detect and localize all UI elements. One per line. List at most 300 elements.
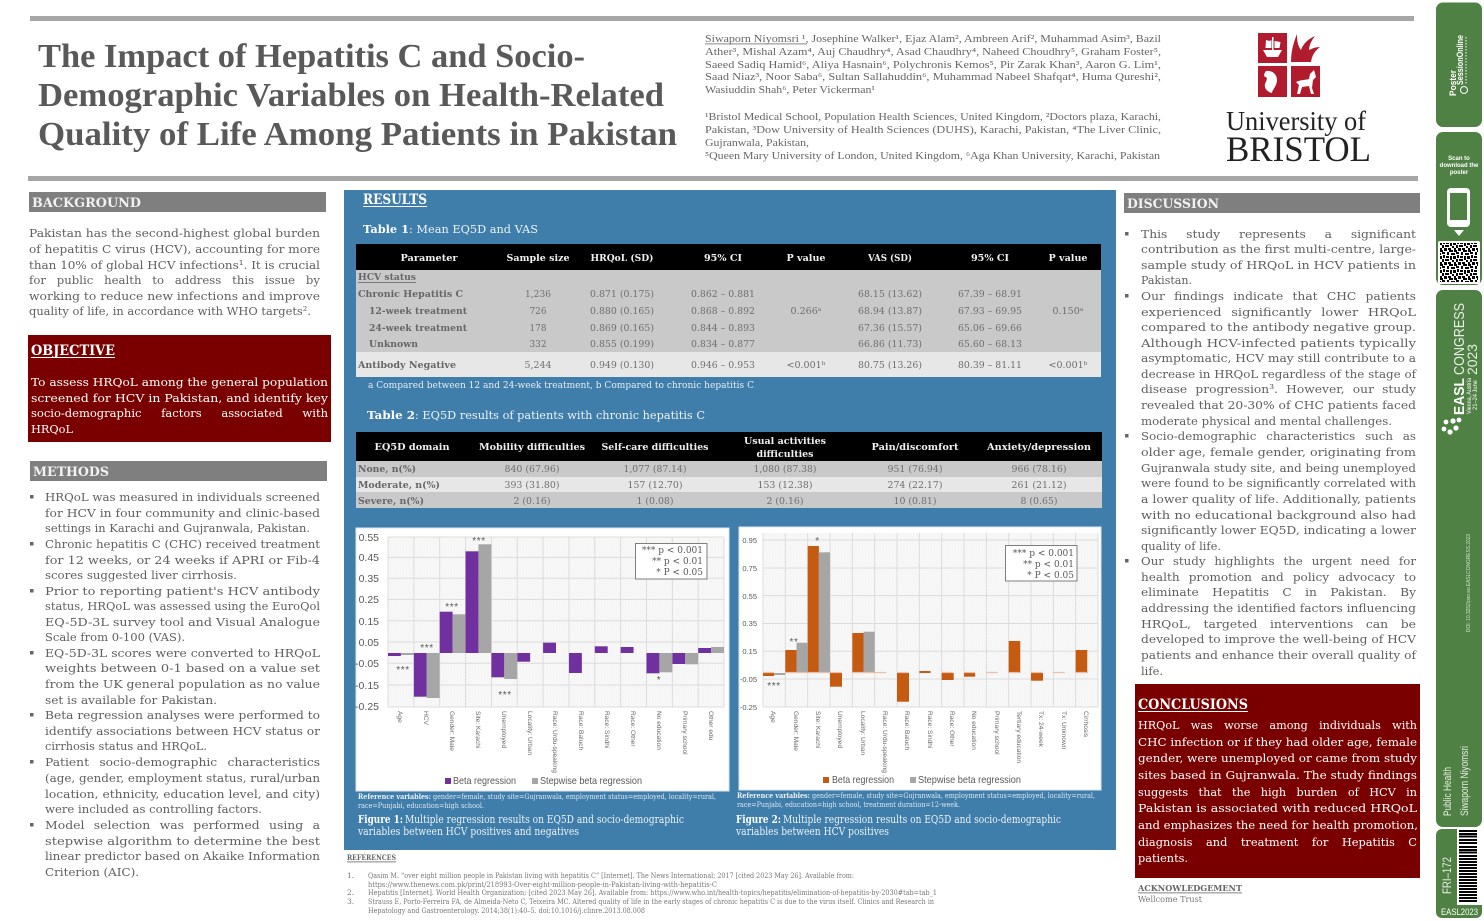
table 2: 153 (12.38) xyxy=(758,480,812,491)
axis tick labels: 0.25 xyxy=(359,594,379,606)
legend: Beta regression xyxy=(832,774,894,786)
logo: University of Bristol xyxy=(1226,33,1371,169)
list: discussion: Gujranwala study site, and being unemployed xyxy=(1141,461,1417,475)
table 1: 80.39 – 81.11 xyxy=(958,360,1022,371)
table 2: 157 (12.70) xyxy=(628,480,682,491)
sidebar: poster number and barcode: FRI–172 xyxy=(1440,857,1454,894)
table 1: 5,244 xyxy=(524,360,552,371)
table 1: 0.871 (0.175) xyxy=(590,289,654,300)
authors: Ather³, Mishal Azam⁴, Auj Chaudhry⁴, Asad Chaudhry⁴, Naheed Choudhry⁵, Graham Foster⁵, xyxy=(705,46,1161,58)
scan caption: download the xyxy=(1440,163,1479,169)
category labels: Primary school xyxy=(993,711,1000,755)
bars: stepwise beta regression xyxy=(774,552,875,675)
references xyxy=(347,853,937,915)
text block: objective: screened for HCV in Pakistan, and identify key xyxy=(31,391,329,405)
table 1: 65.60 – 68.13 xyxy=(958,339,1022,350)
axis tick labels: 0.45 xyxy=(359,552,379,564)
authors: Wasiuddin Shah⁶, Peter Vickerman¹ xyxy=(705,84,875,96)
significance key xyxy=(1006,546,1077,581)
table 1: Chronic Hepatitis C xyxy=(358,289,463,300)
table 2 title: : EQ5D results of patients with chronic hepatitis C xyxy=(415,409,705,422)
table 1: 0.855 (0.199) xyxy=(590,339,654,350)
figure 2 caption: Multiple regression results on EQ5D and socio-demographic xyxy=(783,813,1061,826)
significance stars: *** xyxy=(498,690,512,701)
table 1: 1,236 xyxy=(525,289,551,300)
authors: Saeed Sadiq Hamid⁶, Aliya Hasnain⁶, Polychronis Kemos⁵, Pir Zarak Khan³, Aaron G. Lim¹, xyxy=(705,59,1161,71)
table 2: 1,077 (87.14) xyxy=(624,464,686,475)
references: Hepatology and Gastroenterology. 2014;38(1):40–5. doi:10.1016/j.clinre.2013.08.008 xyxy=(368,906,645,915)
significance stars xyxy=(396,536,661,701)
list: methods: Scale from 0-100 (VAS). xyxy=(45,630,185,644)
table 1: 0.880 (0.165) xyxy=(590,306,654,317)
list: discussion: Our study highlights the urgent need for xyxy=(1141,554,1417,568)
list: discussion: revealed that 20-30% of CHC patients faced xyxy=(1141,398,1417,412)
table 2: 261 (21.12) xyxy=(1012,480,1066,491)
authors: Saad Niaz³, Noor Saba⁶, Sultan Sallahuddin⁶, Muhammad Nabeel Shafqat⁴, Huma Qureshi², xyxy=(705,71,1161,83)
sidebar: EASL congress: Vienna, Austria xyxy=(1467,377,1473,414)
heading: methods: METHODS xyxy=(33,465,109,480)
list: discussion: eliminate Hepatitis C in Pakistan. By xyxy=(1141,585,1417,599)
axis tick labels: -0.25 xyxy=(355,701,379,713)
authors: Siwaporn Niyomsri ¹, Josephine Walker¹, Ejaz Alam², Ambreen Arif², Muhammad Asim³, Bazil xyxy=(705,33,1161,45)
list: discussion: moderate physical and mental challenges. xyxy=(1141,414,1392,428)
table 2: Severe, n(%) xyxy=(358,496,424,507)
list: methods: set is available for Pakistan. xyxy=(45,693,217,707)
list: methods: location, ethnicity, education level, and city) xyxy=(45,787,320,801)
table 1: 67.93 – 69.95 xyxy=(958,306,1022,317)
significance key: *** p < 0.001 xyxy=(642,546,703,556)
list: discussion: significantly lower EQ5D, indicating a lower xyxy=(1141,523,1417,537)
affiliations: ⁵Queen Mary University of London, United Kingdom, ⁶Aga Khan University, Karachi, Pakistan xyxy=(705,150,1161,162)
axis tick labels: -0.05 xyxy=(355,658,379,670)
text block: background: than 10% of global HCV infections¹. It is crucial xyxy=(29,258,320,272)
category labels: Race: Sindhi xyxy=(603,711,610,749)
sidebar: poster session online: Poster xyxy=(1448,70,1459,96)
list: methods xyxy=(30,490,321,879)
figure 1 caption: Multiple regression results on EQ5D and socio-demographic xyxy=(405,813,684,826)
list: discussion: Pakistan. xyxy=(1141,273,1192,287)
heading: objective: OBJECTIVE xyxy=(31,343,115,359)
axis tick labels: 0.55 xyxy=(359,532,379,544)
axis tick labels: 0.15 xyxy=(742,647,757,656)
sidebar: poster number and barcode xyxy=(1436,829,1482,918)
affiliations: ¹Bristol Medical School, Population Health Sciences, United Kingdom, ²Doctors plaza, Karachi, xyxy=(705,111,1161,123)
axis tick labels: 0.75 xyxy=(742,564,757,573)
significance stars: *** xyxy=(767,681,781,692)
list: discussion: with no educational background also had xyxy=(1141,508,1417,522)
significance stars: ** xyxy=(790,637,798,648)
list: discussion: compared to the antibody negative group. xyxy=(1141,320,1416,334)
category labels: Race: Sindhi xyxy=(926,711,933,749)
table 1: 95% CI xyxy=(971,253,1010,264)
sidebar: EASL congress: 2023 xyxy=(1464,344,1480,375)
category labels: Site: Karachi xyxy=(814,711,821,749)
table 1: Antibody Negative xyxy=(357,360,456,371)
text block: objective: socio-demographic factors associated with xyxy=(31,406,329,420)
list: discussion: contribution as the first multi-centre, large- xyxy=(1141,242,1416,256)
significance stars: *** xyxy=(472,536,486,547)
text block: background xyxy=(29,226,321,318)
heading: methods xyxy=(30,461,327,481)
table 1: Sample size xyxy=(506,253,570,264)
text block: objective xyxy=(31,375,329,436)
list: discussion: a lower quality of life. Additionally, patients xyxy=(1141,492,1416,506)
table 2: 2 (0.16) xyxy=(766,496,804,507)
list: methods: Beta regression analyses were performed to xyxy=(45,708,320,722)
references: Hepatitis [Internet]. World Health Organization; [cited 2023 May 26]. Available from: https://www.who.int/health-topics/hepatitis/elimination-of-hepatitis-by-2030#tab=tab_1 xyxy=(368,888,937,897)
table 2: EQ5D domain xyxy=(374,442,450,453)
panel: objective xyxy=(28,335,331,442)
chart: figure 1 bar chart xyxy=(355,528,729,791)
significance key: * P < 0.05 xyxy=(1027,571,1074,581)
axis tick labels: 0.55 xyxy=(742,592,757,601)
references: Strauss E, Porto-Ferreira FA, de Almeida-Neto C, Teixeira MC. Altered quality of life in the early stages of chronic hepatitis C is due to the virus itself. Clinics and Research in xyxy=(368,897,934,906)
category labels: Race: Baluch xyxy=(903,711,910,751)
sidebar: poster number and barcode: EASL2023 xyxy=(1441,907,1478,917)
list: discussion: life. xyxy=(1141,664,1163,678)
bars: beta regression xyxy=(388,551,711,697)
legend xyxy=(445,775,642,787)
axis tick labels: 0.05 xyxy=(359,637,379,649)
affiliations: Gujranwala, Pakistan, xyxy=(705,137,809,149)
figure 1 reference variables: Reference variables: xyxy=(358,792,431,801)
barcode xyxy=(1459,831,1477,901)
affiliations: Pakistan, ³Dow University of Health Sciences (DUHS), Karachi, Pakistan, ⁴The Liver Clinic, xyxy=(705,124,1161,136)
table 1: 178 xyxy=(530,323,546,334)
heading: discussion xyxy=(1124,193,1420,213)
heading: results: RESULTS xyxy=(363,192,427,208)
list: methods: for HCV in four community and clinic-based xyxy=(45,506,321,520)
sidebar: EASL congress: 21–24 June xyxy=(1473,379,1479,410)
top rule xyxy=(30,16,1414,21)
table 1: 726 xyxy=(530,306,546,317)
significance stars xyxy=(767,536,820,692)
axis tick labels: 0.95 xyxy=(742,536,757,545)
text block: conclusions: diagnosis and treatment for Hepatitis C xyxy=(1138,835,1417,849)
axis tick labels xyxy=(355,532,379,713)
heading: discussion: DISCUSSION xyxy=(1127,197,1219,212)
panel: methods xyxy=(30,461,327,879)
panel: conclusions xyxy=(1135,684,1420,878)
list: methods: linear predictor based on Akaike Information xyxy=(45,849,321,863)
category labels: Tx: Unknown xyxy=(1060,711,1067,750)
table 1: <0.001ᵇ xyxy=(1048,360,1088,371)
list: discussion xyxy=(1125,227,1417,678)
table 2: 1 (0.08) xyxy=(636,496,674,507)
table 1 title: Table 1 xyxy=(363,223,409,236)
table 2: Pain/discomfort xyxy=(872,442,959,453)
category labels: Race: Urdu-speaking xyxy=(551,711,558,773)
list: methods: from the UK general population as no value xyxy=(45,677,320,691)
table 2: 8 (0.65) xyxy=(1020,496,1058,507)
title: The Impact of Hepatitis C and Socio- xyxy=(38,38,585,75)
references: 2. xyxy=(347,888,354,897)
significance stars: * xyxy=(815,536,820,547)
list: discussion: were found to be significantly correlated with xyxy=(1141,476,1417,490)
table 1: 0.869 (0.165) xyxy=(590,323,654,334)
table 1 footnote: a Compared between 12 and 24-week treatment, b Compared to chronic hepatitis C xyxy=(368,380,754,391)
category labels: Race: Urdu-speaking xyxy=(881,711,888,773)
significance stars: *** xyxy=(445,602,459,613)
text block: conclusions: Pakistan is associated with reduced HRQoL xyxy=(1138,801,1417,815)
table 1: 80.75 (13.26) xyxy=(858,360,922,371)
list: discussion: asymptomatic, HCV may still contribute to a xyxy=(1141,351,1416,365)
list: discussion: This study represents a significant xyxy=(1141,227,1416,241)
sidebar: EASL congress xyxy=(1436,290,1482,827)
text block: background: quality of life, in accordance with WHO targets². xyxy=(29,304,311,318)
significance key: ** p < 0.01 xyxy=(652,557,703,567)
table 2: Anxiety/depression xyxy=(986,442,1091,453)
sidebar: EASL congress: DOI: 10.3252/pso.eu.EASLCONGRESS.2023 xyxy=(1466,534,1472,632)
figure 2 caption: Figure 2: xyxy=(736,813,781,826)
text block: conclusions: patients. xyxy=(1138,851,1188,865)
figure 2 reference variables: gender=female, study site=Gujranwala, employment status=employed, locality=rural, xyxy=(812,791,1095,800)
list: discussion: decrease in HRQoL regardless of the stage of xyxy=(1141,367,1417,381)
category labels: Gender: Male xyxy=(448,711,455,751)
table 1: 0.868 – 0.892 xyxy=(691,306,755,317)
sidebar: EASL congress: Public Health xyxy=(1442,767,1454,816)
heading: background xyxy=(29,192,326,212)
category labels: Race: Baluch xyxy=(577,711,584,751)
table 1: HRQoL (SD) xyxy=(590,253,654,264)
list: discussion: health promotion and policy advocacy to xyxy=(1141,570,1416,584)
table 1: P value xyxy=(1048,253,1088,264)
category labels xyxy=(769,711,1089,773)
text block: background: for public health to address this issue by xyxy=(29,273,321,287)
list: methods: cirrhosis status and HRQoL. xyxy=(45,739,207,753)
list: discussion: disease progression³. However, our study xyxy=(1141,382,1417,396)
text block: conclusions: and emphasizes the need for health promotion, xyxy=(1138,818,1418,832)
list: discussion: sample study of HRQoL in HCV patients in xyxy=(1141,258,1417,272)
figure 1 caption: variables between HCV positives and negatives xyxy=(357,825,579,838)
figure 1 reference variables: gender=female, study site=Gujranwala, employment status=employed, locality=rural, xyxy=(433,792,716,801)
title xyxy=(38,38,677,153)
table 1: 0.266ᵃ xyxy=(790,306,822,317)
table 1: Unknown xyxy=(369,339,418,350)
sidebar: EASL congress: EASL xyxy=(1451,378,1468,415)
legend xyxy=(823,774,1021,786)
zero-line overlay xyxy=(763,672,1087,674)
legend: Stepwise beta regression xyxy=(918,774,1021,786)
list: methods: Prior to reporting patient's HCV antibody xyxy=(45,584,321,598)
sidebar: EASL congress: Siwaporn Niyomsri xyxy=(1459,746,1471,816)
table 1: 0.150ᵃ xyxy=(1052,306,1084,317)
text block: conclusions: HRQoL was worse among individuals with xyxy=(1138,718,1418,732)
table 2: 274 (22.17) xyxy=(888,480,942,491)
table 2: 951 (76.94) xyxy=(888,464,942,475)
title: Demographic Variables on Health-Related xyxy=(38,77,664,114)
references: 3. xyxy=(347,897,354,906)
axis tick labels: 0.35 xyxy=(359,573,379,585)
list: methods: scores suggested liver cirrhosis. xyxy=(45,568,237,582)
text block: background: Pakistan has the second-highest global burden xyxy=(29,226,321,240)
significance stars: *** xyxy=(420,643,434,654)
table 1: <0.001ᵇ xyxy=(786,360,826,371)
significance key xyxy=(636,544,707,579)
chart: figure 2 bar chart xyxy=(739,527,1101,790)
table 2: 966 (78.16) xyxy=(1012,464,1066,475)
figure 2 caption: variables between HCV positives xyxy=(735,825,889,838)
text block: background: of hepatitis C virus (HCV), accounting for more xyxy=(29,242,320,256)
significance stars: * xyxy=(657,675,661,686)
category labels: Tertiary education xyxy=(1015,711,1022,763)
table 1: 68.94 (13.87) xyxy=(858,306,922,317)
acknowledgement: ACKNOWLEDGEMENT xyxy=(1137,884,1243,894)
references: 1. xyxy=(347,871,354,880)
list: discussion: quality of life. xyxy=(1141,539,1221,553)
heading: background: BACKGROUND xyxy=(32,196,141,211)
table 1: 0.946 – 0.953 xyxy=(691,360,755,371)
logo: University of Bristol: BRISTOL xyxy=(1226,129,1371,169)
list: discussion: addressing the identified factors influencing xyxy=(1141,601,1417,615)
figure 1 caption xyxy=(357,813,684,838)
axis tick labels: -0.15 xyxy=(355,680,379,692)
panel: background xyxy=(29,192,326,318)
icon: phone xyxy=(1447,188,1470,236)
table 2: 2 (0.16) xyxy=(514,496,550,507)
table 2: 1,080 (87.38) xyxy=(754,464,816,475)
table 2: Mobility difficulties xyxy=(479,442,585,453)
table 1: 67.39 – 68.91 xyxy=(958,289,1022,300)
list: discussion: older age, female gender, originating from xyxy=(1141,445,1416,459)
table 1: 65.06 – 69.66 xyxy=(958,323,1022,334)
text block: objective: To assess HRQoL among the general population xyxy=(31,375,329,389)
category labels: No education xyxy=(655,711,662,750)
list: methods: EQ-5D-3L scores were converted to HRQoL xyxy=(45,646,320,660)
table 2: Self-care difficulties xyxy=(602,442,708,453)
axis tick labels: 0.35 xyxy=(742,619,757,628)
text block: conclusions: sites based in Gujranwala. The study findings xyxy=(1138,768,1417,782)
category labels: Primary school xyxy=(681,711,688,755)
list: methods: weights between 0-1 based on a value set xyxy=(45,661,320,675)
significance key: ** p < 0.01 xyxy=(1023,560,1074,570)
legend: Beta regression xyxy=(453,775,516,787)
table 2: 393 (31.80) xyxy=(504,480,560,491)
list: methods: Criterion (AIC). xyxy=(45,865,139,879)
category labels: No education xyxy=(970,711,977,750)
list: methods: Chronic hepatitis C (CHC) received treatment xyxy=(45,537,320,551)
list: discussion: HRQoL, targeted interventions can be xyxy=(1141,617,1416,631)
table 1: VAS (SD) xyxy=(867,253,912,264)
list: methods: Patient socio-demographic characteristics xyxy=(45,755,320,769)
legend: Stepwise beta regression xyxy=(540,775,642,787)
wordmark: University of xyxy=(1226,106,1366,136)
list: discussion: Although HCV-infected patients typically xyxy=(1140,336,1417,350)
text block: conclusions: suggests that the high burden of HCV in xyxy=(1138,785,1418,799)
table 1: 66.86 (11.73) xyxy=(858,339,922,350)
references: REFERENCES xyxy=(347,853,396,862)
table 2 xyxy=(356,432,1102,508)
table 2 title: Table 2 xyxy=(367,409,415,422)
list: discussion: Our findings indicate that CHC patients xyxy=(1141,289,1416,303)
table 1: 332 xyxy=(530,339,546,350)
list: methods: status, HRQoL was assessed using the EuroQol xyxy=(45,599,320,613)
text block: background: working to reduce new infections and improve xyxy=(29,289,320,303)
table 1: Parameter xyxy=(400,253,459,264)
title: Quality of Life Among Patients in Pakistan xyxy=(38,116,677,153)
table 1: 95% CI xyxy=(704,253,743,264)
list: methods: Model selection was performed using a xyxy=(45,818,320,832)
list: discussion: patients and enhance their overall quality of xyxy=(1141,648,1417,662)
icon: university crest xyxy=(1258,33,1320,97)
acknowledgement xyxy=(1137,884,1243,905)
table 1 xyxy=(356,244,1101,377)
significance key: *** p < 0.001 xyxy=(1013,549,1074,559)
scan caption: poster xyxy=(1450,170,1469,176)
text block: conclusions xyxy=(1138,718,1418,865)
list: methods: stepwise algorithm to determine the best xyxy=(45,834,320,848)
list: discussion: developed to improve the well-being of HCV xyxy=(1141,632,1417,646)
authors xyxy=(705,33,1161,96)
axis tick labels xyxy=(740,536,757,712)
category labels xyxy=(396,711,714,773)
scan caption: Scan to xyxy=(1448,156,1470,162)
figure 2 reference variables xyxy=(737,791,1095,809)
table 1: 0.834 – 0.877 xyxy=(691,339,755,350)
text block: conclusions: CHC infection or if they had older age, female xyxy=(1138,735,1417,749)
category labels: Locality: Urban xyxy=(859,711,866,755)
axis tick labels: -0.05 xyxy=(740,675,757,684)
category labels: Unemployed xyxy=(836,711,843,748)
category labels: Age xyxy=(769,711,776,723)
category labels: Age xyxy=(396,711,403,723)
table 1: 68.15 (13.62) xyxy=(858,289,922,300)
table 1: P value xyxy=(786,253,826,264)
table 1 title: : Mean EQ5D and VAS xyxy=(409,223,538,236)
axis tick labels: -0.25 xyxy=(740,703,757,712)
table 2: Moderate, n(%) xyxy=(358,480,440,491)
category labels: Cirrhosis xyxy=(1082,711,1089,738)
significance key: * P < 0.05 xyxy=(656,568,703,578)
panel: discussion xyxy=(1124,193,1420,678)
table 2: 10 (0.81) xyxy=(894,496,936,507)
list: methods: (age, gender, employment status, rural/urban xyxy=(45,771,321,785)
panel: results xyxy=(344,190,1116,850)
table 1: 24-week treatment xyxy=(369,323,468,334)
table 1: HCV status xyxy=(358,272,416,283)
table 2: Usual activities xyxy=(744,436,826,447)
category labels: Locality: Urban xyxy=(526,711,533,755)
table 1: 67.36 (15.57) xyxy=(858,323,922,334)
sidebar: poster session online: SessionOnline xyxy=(1455,35,1465,85)
category labels: Gender: Male xyxy=(792,711,799,751)
significance stars: *** xyxy=(396,665,410,676)
axis tick labels: 0.15 xyxy=(359,616,379,628)
references: https://www.thenews.com.pk/print/218993-Over-eight-million-people-in-Pakistan-living-with-hepatitis-C xyxy=(368,880,717,889)
figure 1 caption: Figure 1: xyxy=(358,813,403,826)
list: discussion: Socio-demographic characteristics such as xyxy=(1141,429,1416,443)
table 1: 0.844 – 0.893 xyxy=(691,323,755,334)
list: discussion: experienced significantly lower HRQoL xyxy=(1141,305,1416,319)
bars: beta regression xyxy=(763,546,1087,702)
list: methods: identify associations between HCV status or xyxy=(45,724,321,738)
bars: stepwise beta regression xyxy=(401,544,724,698)
icon: QR code xyxy=(1438,241,1480,284)
figure 2 reference variables: Reference variables: xyxy=(737,791,810,800)
category labels: Race: Other xyxy=(629,711,636,747)
sidebar: poster session online xyxy=(1436,2,1482,127)
sidebar: scan to download xyxy=(1436,132,1482,285)
affiliations xyxy=(705,111,1161,162)
table 1: 0.949 (0.130) xyxy=(590,360,654,371)
table 2: difficulties xyxy=(756,449,814,460)
figure 1 reference variables: race=Punjabi, education=high school. xyxy=(358,801,484,810)
table 1: 12-week treatment xyxy=(369,306,468,317)
table 2: 840 (67.96) xyxy=(504,464,560,475)
category labels: Site: Karachi xyxy=(474,711,481,749)
list: methods: for 12 weeks, or 24 weeks if APRI or Fib-4 xyxy=(45,553,320,567)
references: Qasim M. “over eight million people in Pakistan living with hepatitis C” [Internet]. The News International; 2017 [cited 2023 May 26]. Available from: xyxy=(368,871,854,880)
